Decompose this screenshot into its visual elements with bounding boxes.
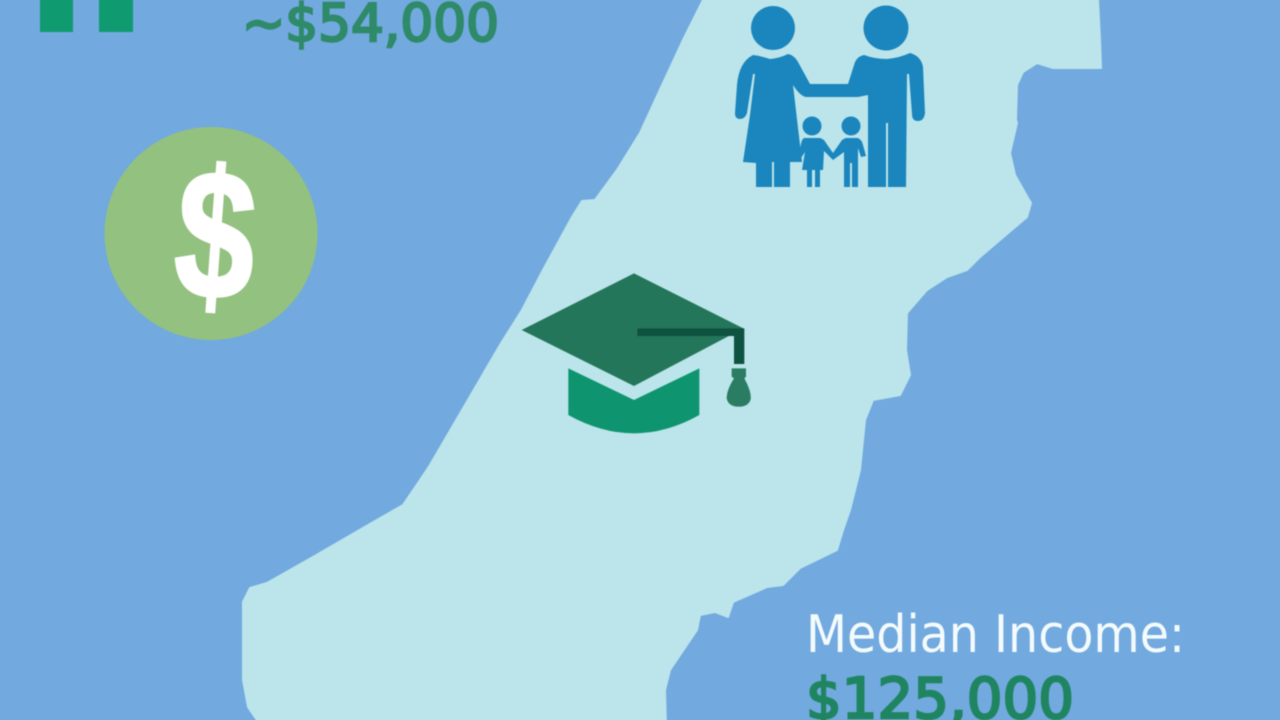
label: Median Income: Median Income: [806,605,1185,665]
parent heads [751,6,908,50]
child figures [798,116,866,187]
mother figure with arm joined to father [735,53,925,187]
cap board [522,273,743,386]
cap base [568,368,699,433]
icon: dollar coin: $ [169,129,263,340]
map: land region [243,0,1101,720]
cap tassel [727,368,751,407]
icon: family [735,6,925,187]
icon: dollar coin [104,127,318,340]
icon: green bars cropped at top [40,0,133,32]
icon: graduation cap [522,273,751,433]
cap tassel cord [637,328,744,364]
